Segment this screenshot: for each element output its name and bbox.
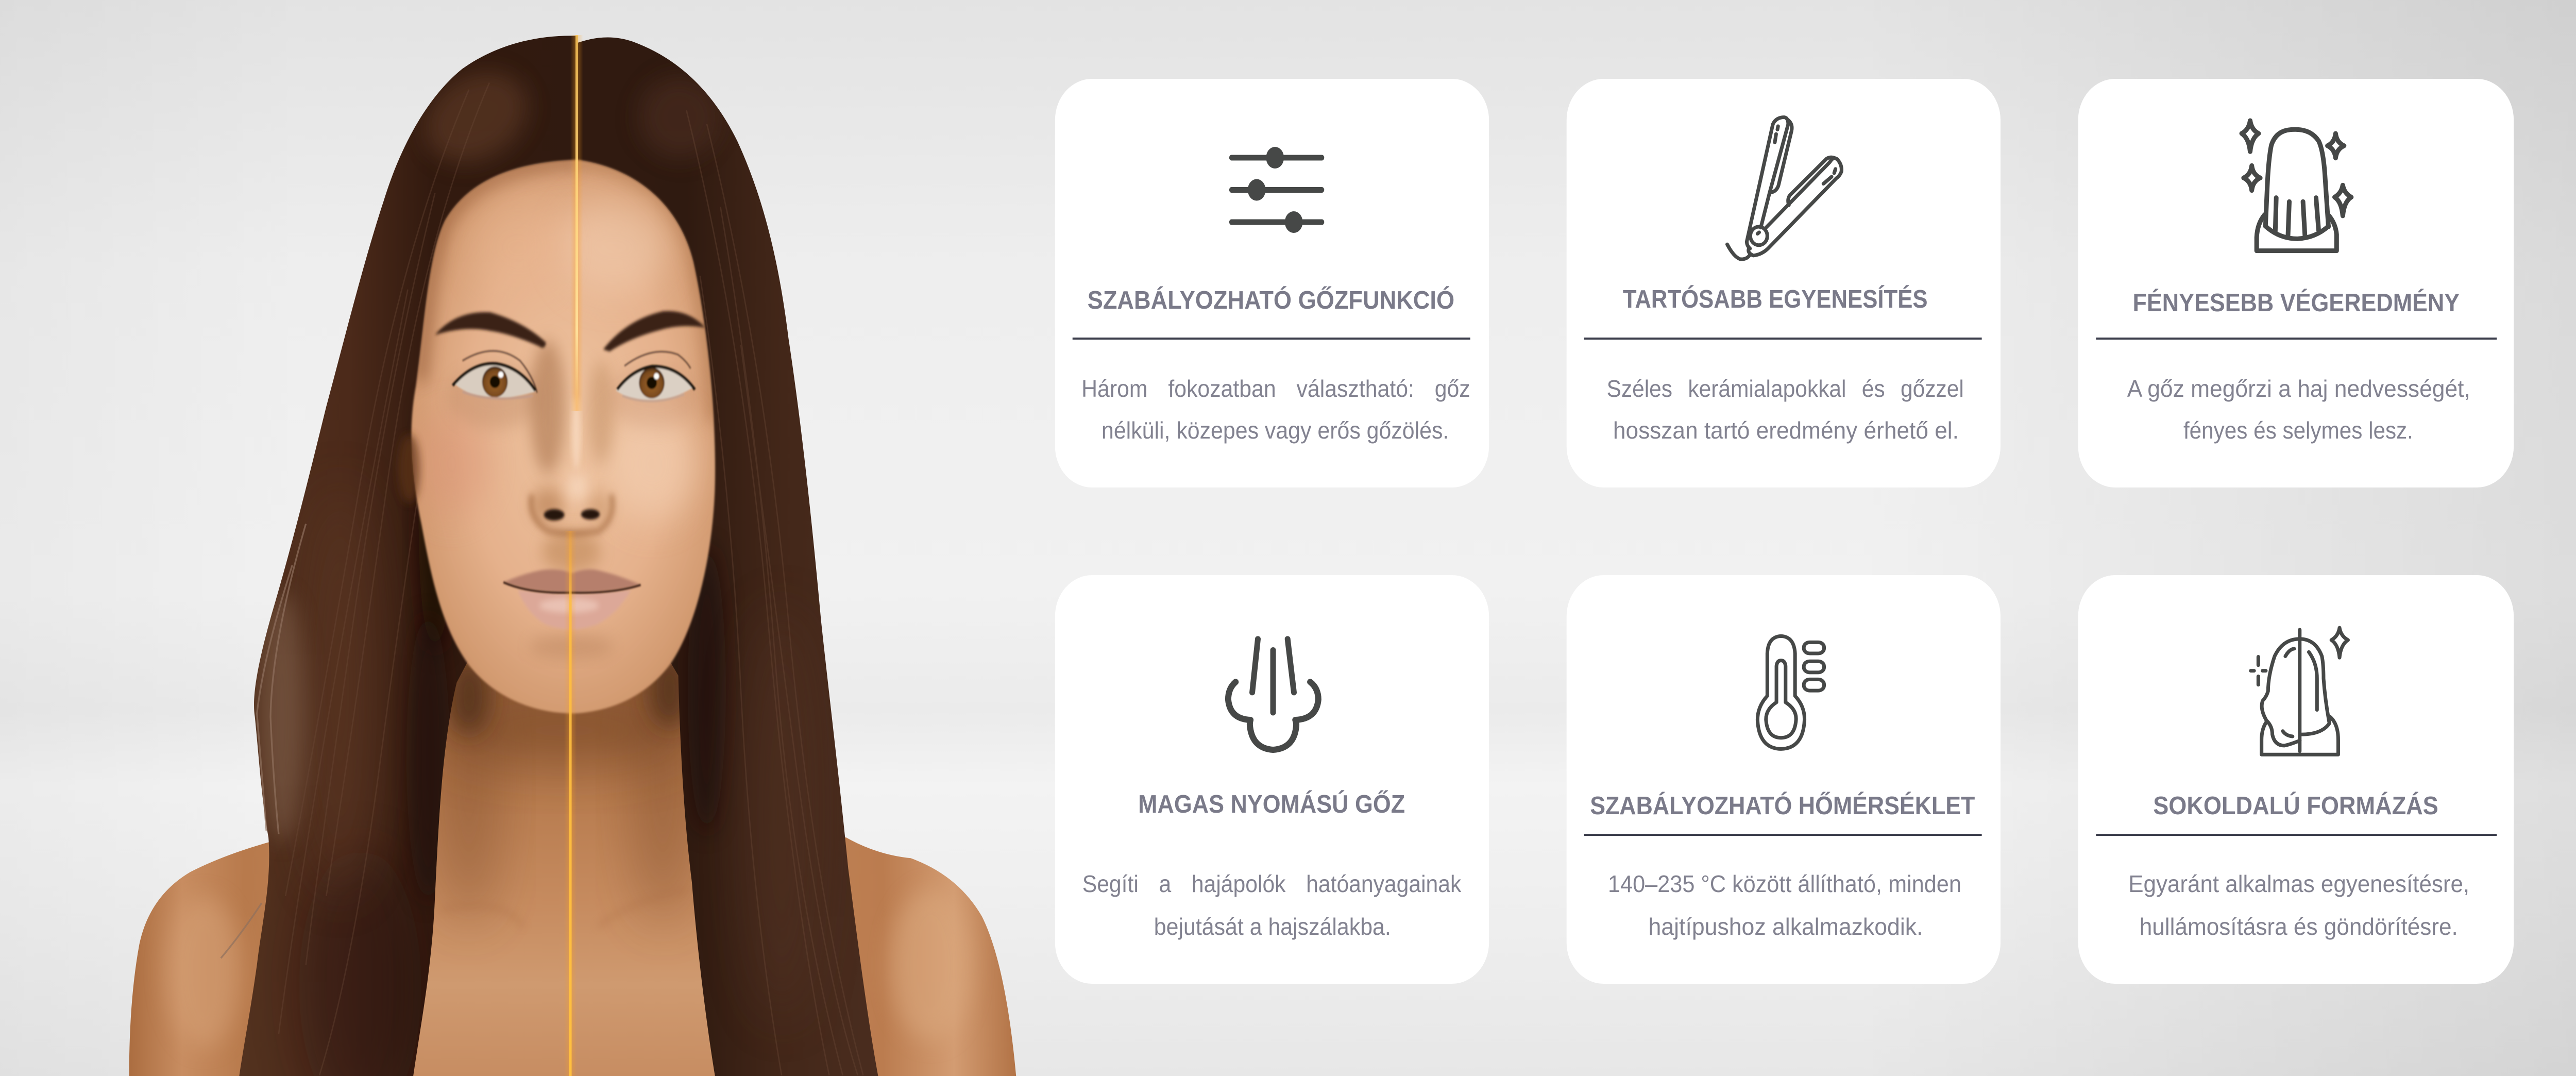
hair shading <box>259 54 863 1076</box>
description <box>1081 376 1470 444</box>
panel: shinier result <box>2078 79 2514 487</box>
portrait photo of woman with long straight hair <box>129 35 1016 1076</box>
description: hullámosításra és göndörítésre. <box>2140 914 2458 940</box>
description <box>1608 871 1961 940</box>
description: fényes és selymes lesz. <box>2183 417 2413 444</box>
right eye <box>616 351 695 401</box>
description: 140–235 °C között állítható, minden <box>1608 871 1961 897</box>
flyaway wisps <box>221 524 306 958</box>
icon: half straight half wavy hair <box>2251 628 2348 754</box>
description: A gőz megőrzi a haj nedvességét, <box>2127 376 2470 402</box>
face <box>412 160 715 713</box>
description: Egyaránt alkalmas egyenesítésre, <box>2128 871 2469 897</box>
panel: adjustable steam function <box>1055 79 1489 487</box>
description: Három fokozatban választható: gőz <box>1081 376 1470 402</box>
description: Segíti a hajápolók hatóanyagainak <box>1082 871 1462 897</box>
heading: SZABÁLYOZHATÓ GŐZFUNKCIÓ <box>1088 285 1454 314</box>
description: hosszan tartó eredmény érhető el. <box>1613 417 1959 444</box>
description: nélküli, közepes vagy erős gőzölés. <box>1101 417 1449 444</box>
description: Széles kerámialapokkal és gőzzel <box>1606 376 1964 402</box>
heading: MAGAS NYOMÁSÚ GŐZ <box>1138 789 1405 818</box>
description <box>1082 871 1462 940</box>
heading: SOKOLDALÚ FORMÁZÁS <box>2153 791 2438 820</box>
icon: sliders <box>1231 147 1322 233</box>
nose <box>531 397 612 533</box>
panel: longer lasting straightening <box>1567 79 2001 487</box>
ear shadow <box>398 434 420 503</box>
face shading <box>416 160 714 658</box>
shoulders and chest <box>129 837 1016 1076</box>
icon: thermometer <box>1757 636 1824 749</box>
eyebrows <box>435 311 705 351</box>
icon: shiny hair <box>2242 121 2351 251</box>
orange centre line <box>564 35 583 1076</box>
lips <box>503 569 641 629</box>
heading: SZABÁLYOZHATÓ HŐMÉRSÉKLET <box>1590 791 1975 820</box>
panel: adjustable temperature <box>1567 575 2001 984</box>
description <box>2127 376 2470 444</box>
heading: FÉNYESEBB VÉGEREDMÉNY <box>2133 288 2460 317</box>
heading: TARTÓSABB EGYENESÍTÉS <box>1623 284 1928 313</box>
icon: steam nozzle <box>1228 639 1318 750</box>
left eye <box>453 351 537 398</box>
description <box>1606 376 1964 444</box>
hair <box>239 36 878 1076</box>
description <box>2128 871 2469 940</box>
icon: hair straightener <box>1727 117 1841 259</box>
description: bejutását a hajszálakba. <box>1154 914 1391 940</box>
hair strands <box>279 83 863 1075</box>
neck <box>408 620 748 1076</box>
panel: high pressure steam <box>1055 575 1489 984</box>
panel: versatile styling <box>2078 575 2514 984</box>
description: hajtípushoz alkalmazkodik. <box>1649 914 1923 940</box>
